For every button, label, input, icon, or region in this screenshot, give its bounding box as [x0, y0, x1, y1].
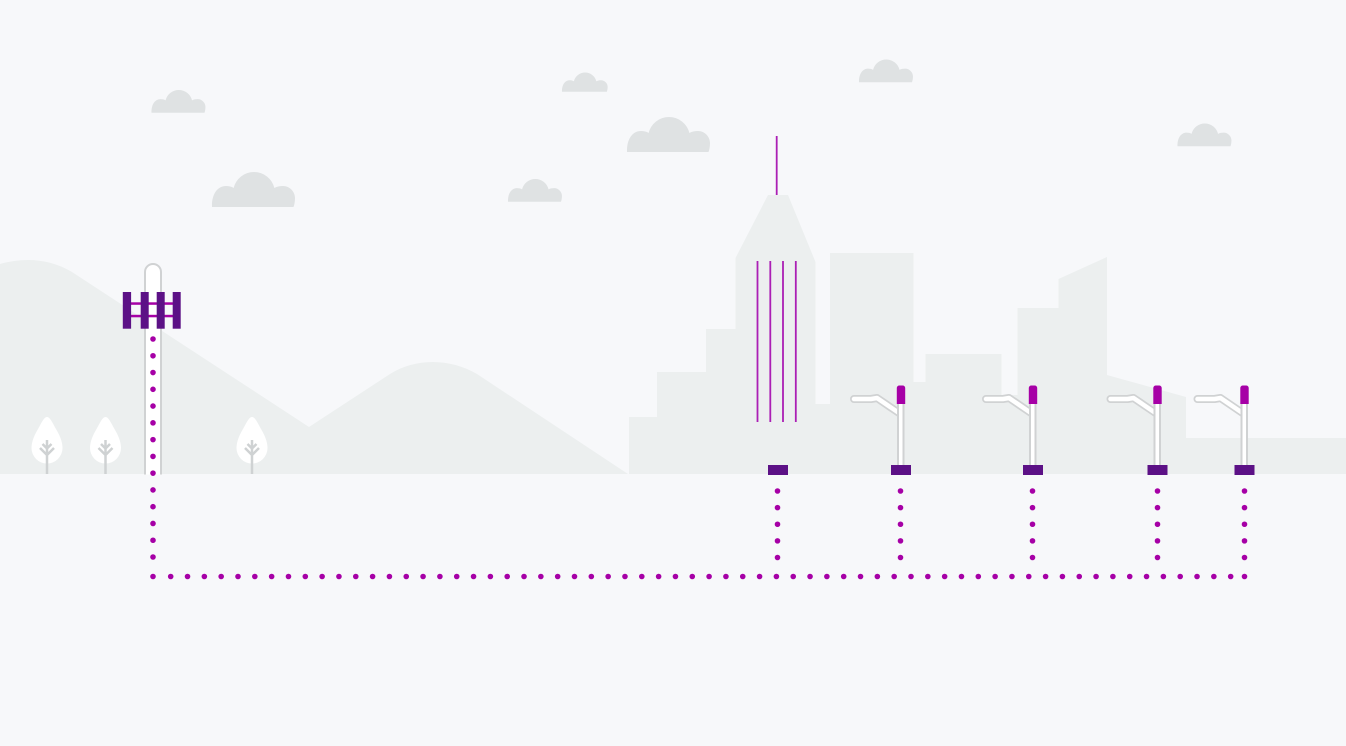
- tree 3: [236, 417, 268, 474]
- building antenna lines: [758, 136, 796, 422]
- building base unit: [768, 465, 788, 475]
- mountains: [0, 260, 628, 474]
- tree 2: [90, 417, 121, 474]
- street lamp 4: [1198, 386, 1254, 475]
- city skyline: [629, 195, 1346, 474]
- clouds: [151, 59, 1231, 207]
- cell tower: [123, 264, 181, 474]
- tree 1: [32, 417, 62, 474]
- dotted connection network: [153, 339, 1244, 576]
- street lamp 3: [1110, 386, 1168, 475]
- street lamp 2: [986, 386, 1043, 475]
- street lamp 1: [854, 386, 911, 475]
